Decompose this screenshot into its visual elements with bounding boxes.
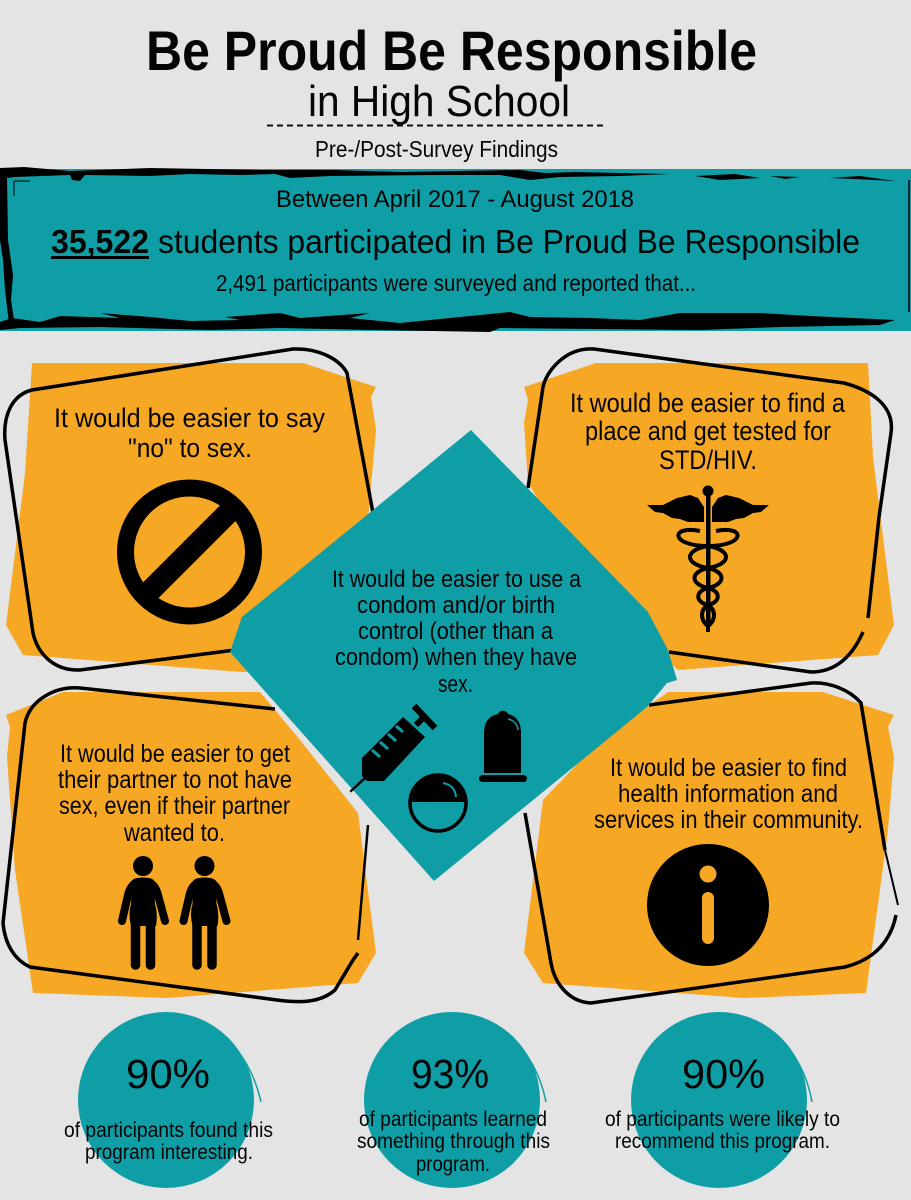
- date range: Between April 2017 - August 2018: [276, 186, 634, 213]
- panel text: condom) when they have: [335, 644, 577, 671]
- survey findings label: Pre-/Post-Survey Findings: [315, 136, 558, 162]
- survey statement: 2,491 participants were surveyed and reported that...: [216, 270, 696, 296]
- icon: pill: [410, 774, 466, 831]
- stat: 90% likely to recommend: [605, 1012, 840, 1188]
- panel text: sex.: [438, 671, 473, 698]
- participant count: 35,522: [51, 223, 149, 260]
- description: [357, 1108, 550, 1176]
- panel: find testing: [524, 349, 894, 672]
- description: something through this: [357, 1130, 550, 1153]
- description: of participants found this: [64, 1119, 273, 1142]
- panel text: [58, 740, 292, 847]
- icon: two people: [122, 856, 226, 965]
- subtitle: in High School: [308, 77, 570, 126]
- description: recommend this program.: [615, 1130, 830, 1153]
- description: of participants learned: [359, 1108, 547, 1131]
- panel text: control (other than a: [358, 618, 554, 645]
- percentage: 90%: [126, 1051, 210, 1097]
- panel text: health information and: [618, 780, 838, 808]
- panel text: [594, 754, 863, 834]
- panel: say no to sex: [5, 349, 376, 672]
- percentage: 90%: [682, 1051, 765, 1097]
- panel text: condom and/or birth: [357, 592, 555, 619]
- panel text: STD/HIV.: [659, 445, 757, 475]
- panel text: sex, even if their partner: [59, 792, 290, 820]
- panel text: place and get tested for: [585, 416, 831, 446]
- panel text: [54, 403, 325, 463]
- description: program interesting.: [85, 1141, 253, 1164]
- icon: caduceus: [647, 486, 769, 632]
- panel text: It would be easier to use a: [332, 566, 582, 593]
- stat: 90% found interesting: [64, 1012, 273, 1188]
- panel text: wanted to.: [123, 819, 225, 847]
- panel text: [570, 388, 846, 475]
- description: of participants were likely to: [605, 1108, 840, 1131]
- stat: 93% learned something: [357, 1012, 550, 1188]
- panel text: [332, 566, 582, 698]
- icon: syringe: [351, 706, 435, 791]
- panel: central diamond on condom and birth control use: [230, 430, 677, 881]
- panel text: It would be easier to find a: [570, 388, 846, 418]
- panel text: It would be easier to say: [54, 403, 325, 433]
- banner: participation summary: [0, 167, 911, 332]
- description: program.: [416, 1153, 490, 1176]
- description: [64, 1119, 273, 1164]
- icon: condom: [479, 711, 527, 782]
- header: [146, 19, 757, 162]
- panel: health information: [524, 683, 898, 1003]
- percentage: 93%: [411, 1051, 489, 1097]
- icon: information: [647, 844, 769, 966]
- panel text: services in their community.: [594, 806, 863, 834]
- icon: prohibition sign: [126, 488, 254, 616]
- panel text: It would be easier to get: [60, 740, 290, 768]
- description: [605, 1108, 840, 1153]
- panel: partner refusal: [3, 688, 376, 1002]
- participation statement: students participated in Be Proud Be Responsible: [158, 223, 860, 260]
- panel text: It would be easier to find: [610, 754, 847, 782]
- panel text: "no" to sex.: [128, 433, 252, 463]
- panel text: their partner to not have: [58, 766, 292, 794]
- title: Be Proud Be Responsible: [146, 19, 757, 82]
